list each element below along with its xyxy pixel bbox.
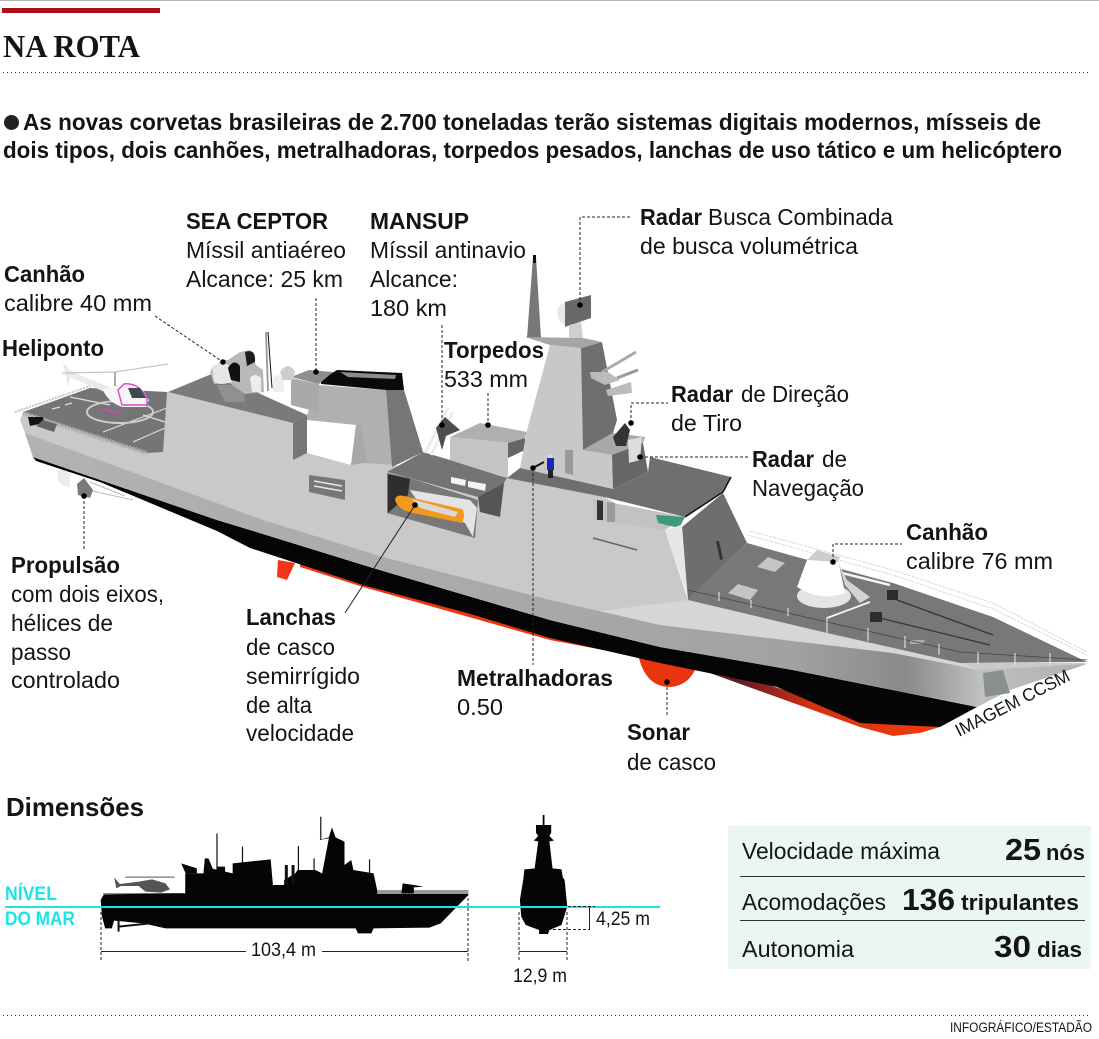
main mast pole xyxy=(527,255,541,338)
funnel tower light face xyxy=(307,385,392,465)
label: Radar de navegação: Radar xyxy=(752,446,814,472)
rudder xyxy=(277,560,295,580)
front silhouette xyxy=(520,815,567,934)
small block xyxy=(291,378,319,412)
label: Canhão 40 mm xyxy=(4,261,152,316)
side silhouette xyxy=(101,817,468,933)
bridge front white panel xyxy=(665,525,688,597)
funnel black cap xyxy=(321,370,404,390)
forecastle deck xyxy=(688,543,1087,665)
hull sonar dome xyxy=(638,654,696,687)
label: Radar de direção de tiro xyxy=(671,381,849,436)
label: Radar de direção de tiro: de Direção xyxy=(741,381,849,407)
40 mm gun and sensors xyxy=(210,332,295,402)
machine gun xyxy=(531,462,544,469)
label: Radar de navegação: de xyxy=(822,446,847,472)
label: Radar de direção de tiro: Radar xyxy=(671,381,733,407)
label: Metralhadoras: 0.50 xyxy=(457,694,503,720)
label: Radar de navegação: Navegação xyxy=(752,475,864,501)
label: Lanchas: Lanchas xyxy=(246,604,336,630)
76 mm gun xyxy=(797,550,890,618)
funnel tower dark face xyxy=(386,390,423,467)
heading: dimensions: Dimensões xyxy=(6,792,144,822)
label: Lanchas: de alta xyxy=(246,692,313,718)
length dimension: 103,4 m xyxy=(251,940,316,961)
stat: autonomy: 30 xyxy=(994,929,1031,964)
label: Lanchas: velocidade xyxy=(246,720,354,746)
propeller and shaft xyxy=(57,470,133,500)
intro text: dois tipos, dois canhões, metralhadoras, torpedos pesados, lanchas de uso tático e um helicóptero xyxy=(3,137,1062,163)
label: Propulsão: controlado xyxy=(11,667,120,693)
label: Metralhadoras xyxy=(457,665,613,720)
bridge front dark wall xyxy=(682,493,747,600)
stat: autonomy: Autonomia xyxy=(742,936,855,962)
label: Radar busca combinada: de busca volumétrica xyxy=(640,233,859,259)
ship illustration xyxy=(15,255,1087,736)
beam dimension: 12,9 m xyxy=(513,966,567,987)
label: Canhão 40 mm: calibre 40 mm xyxy=(4,290,152,316)
label: Radar busca combinada: Radar xyxy=(640,204,702,230)
green bridge windows xyxy=(656,515,685,528)
label: Canhão 76 mm: calibre 76 mm xyxy=(906,548,1053,574)
label: Radar busca combinada xyxy=(640,204,894,259)
seats on deck xyxy=(451,477,486,491)
draught dimension xyxy=(548,906,650,930)
bridge wing deck xyxy=(507,457,731,517)
label: Sonar xyxy=(627,719,716,775)
deck hatches xyxy=(728,557,785,600)
mast structure xyxy=(520,337,617,489)
hangar side vent xyxy=(309,475,345,500)
sea level label: DO MAR xyxy=(5,909,75,930)
label: Mansup: Alcance: xyxy=(370,266,458,292)
label: Radar de direção de tiro: de Tiro xyxy=(671,410,742,436)
label: Propulsão xyxy=(11,552,164,693)
label: Torpedos: Torpedos xyxy=(444,337,544,363)
stat: autonomy: dias xyxy=(1037,937,1082,962)
crew figure xyxy=(547,454,554,478)
label: Radar de navegação xyxy=(752,446,864,501)
length dimension xyxy=(101,898,468,961)
label: Propulsão: passo xyxy=(11,639,71,665)
stat: speed: Velocidade máxima xyxy=(742,838,941,864)
label: Mansup: Míssil antinavio xyxy=(370,237,526,263)
leader lines and dots xyxy=(81,217,902,716)
label: Propulsão: Propulsão xyxy=(11,552,120,578)
stat: crew: Acomodações xyxy=(742,889,886,915)
stat: crew: 136 xyxy=(902,882,955,917)
label: Sea Ceptor: Alcance: 25 km xyxy=(186,266,343,292)
lower hull strake xyxy=(25,433,1087,707)
label: Sonar: Sonar xyxy=(627,719,690,745)
stat: speed: 25 xyxy=(1005,832,1041,867)
label: Propulsão: com dois eixos, xyxy=(11,581,164,607)
intro text: As novas corvetas brasileiras de 2.700 toneladas terão sistemas digitais modernos, mísseis de xyxy=(23,109,1041,135)
sea level label xyxy=(5,883,75,930)
white intake panel xyxy=(307,420,356,465)
stat: crew: tripulantes xyxy=(961,890,1079,915)
stat: crew xyxy=(742,882,1079,917)
helicopter xyxy=(62,363,168,414)
hangar top deck xyxy=(168,373,307,423)
stat: speed xyxy=(742,832,1085,867)
label: Mansup xyxy=(370,208,526,321)
title: NA ROTA xyxy=(3,28,140,64)
bridge deck house xyxy=(575,423,648,489)
label: Torpedos: 533 mm xyxy=(444,366,528,392)
sea level line xyxy=(5,906,660,908)
label: Lanchas: semirrígido xyxy=(246,663,360,689)
label: Torpedos xyxy=(444,337,544,392)
main hull side xyxy=(20,392,1087,707)
label: Radar busca combinada: Busca Combinada xyxy=(708,204,894,230)
label: Mansup: MANSUP xyxy=(370,208,469,234)
boat bay cutaway xyxy=(387,473,504,538)
label: Mansup: 180 km xyxy=(370,295,447,321)
bow anchor xyxy=(983,670,1010,697)
helicopter silhouette xyxy=(103,877,183,894)
label: Metralhadoras: Metralhadoras xyxy=(457,665,613,691)
beam dimension xyxy=(513,912,567,987)
hull antifouling red xyxy=(300,560,940,736)
bridge side xyxy=(593,499,685,550)
helicopter deck xyxy=(15,386,167,453)
chaff launchers xyxy=(870,590,898,622)
label: Heliponto: Heliponto xyxy=(2,335,104,361)
tower block dark face xyxy=(293,415,307,460)
stat: autonomy xyxy=(742,929,1082,964)
draught dimension: 4,25 m xyxy=(596,909,650,930)
label: Sea Ceptor: SEA CEPTOR xyxy=(186,208,328,234)
bow light strip xyxy=(600,600,980,670)
red title accent bar xyxy=(2,8,160,13)
label: Propulsão: hélices de xyxy=(11,610,113,636)
stat: speed: nós xyxy=(1046,840,1085,865)
black boot-top band xyxy=(33,457,977,727)
label: Sea Ceptor xyxy=(186,208,346,292)
label: Lanchas: de casco xyxy=(246,634,335,660)
label: Canhão 40 mm: Canhão xyxy=(4,261,85,287)
mast missile launchers xyxy=(590,352,638,396)
sea level label: NÍVEL xyxy=(5,883,57,905)
label: Canhão 76 mm: Canhão xyxy=(906,519,988,545)
label: Lanchas xyxy=(246,604,360,746)
orange boat xyxy=(395,496,464,523)
deck-house with torpedos xyxy=(450,423,527,478)
label: Canhão 76 mm xyxy=(906,519,1053,574)
midship deck xyxy=(387,452,507,497)
lower rail xyxy=(688,590,1087,660)
intro text xyxy=(3,109,1062,163)
torpedo launcher xyxy=(425,408,460,455)
stats panel xyxy=(728,826,1091,969)
label: Sea Ceptor: Míssil antiaéreo xyxy=(186,237,346,263)
label: Sonar: de casco xyxy=(627,749,716,775)
deck railings xyxy=(747,531,1087,655)
top search radar xyxy=(557,295,591,338)
image credit: IMAGEM CCSM xyxy=(952,666,1073,741)
